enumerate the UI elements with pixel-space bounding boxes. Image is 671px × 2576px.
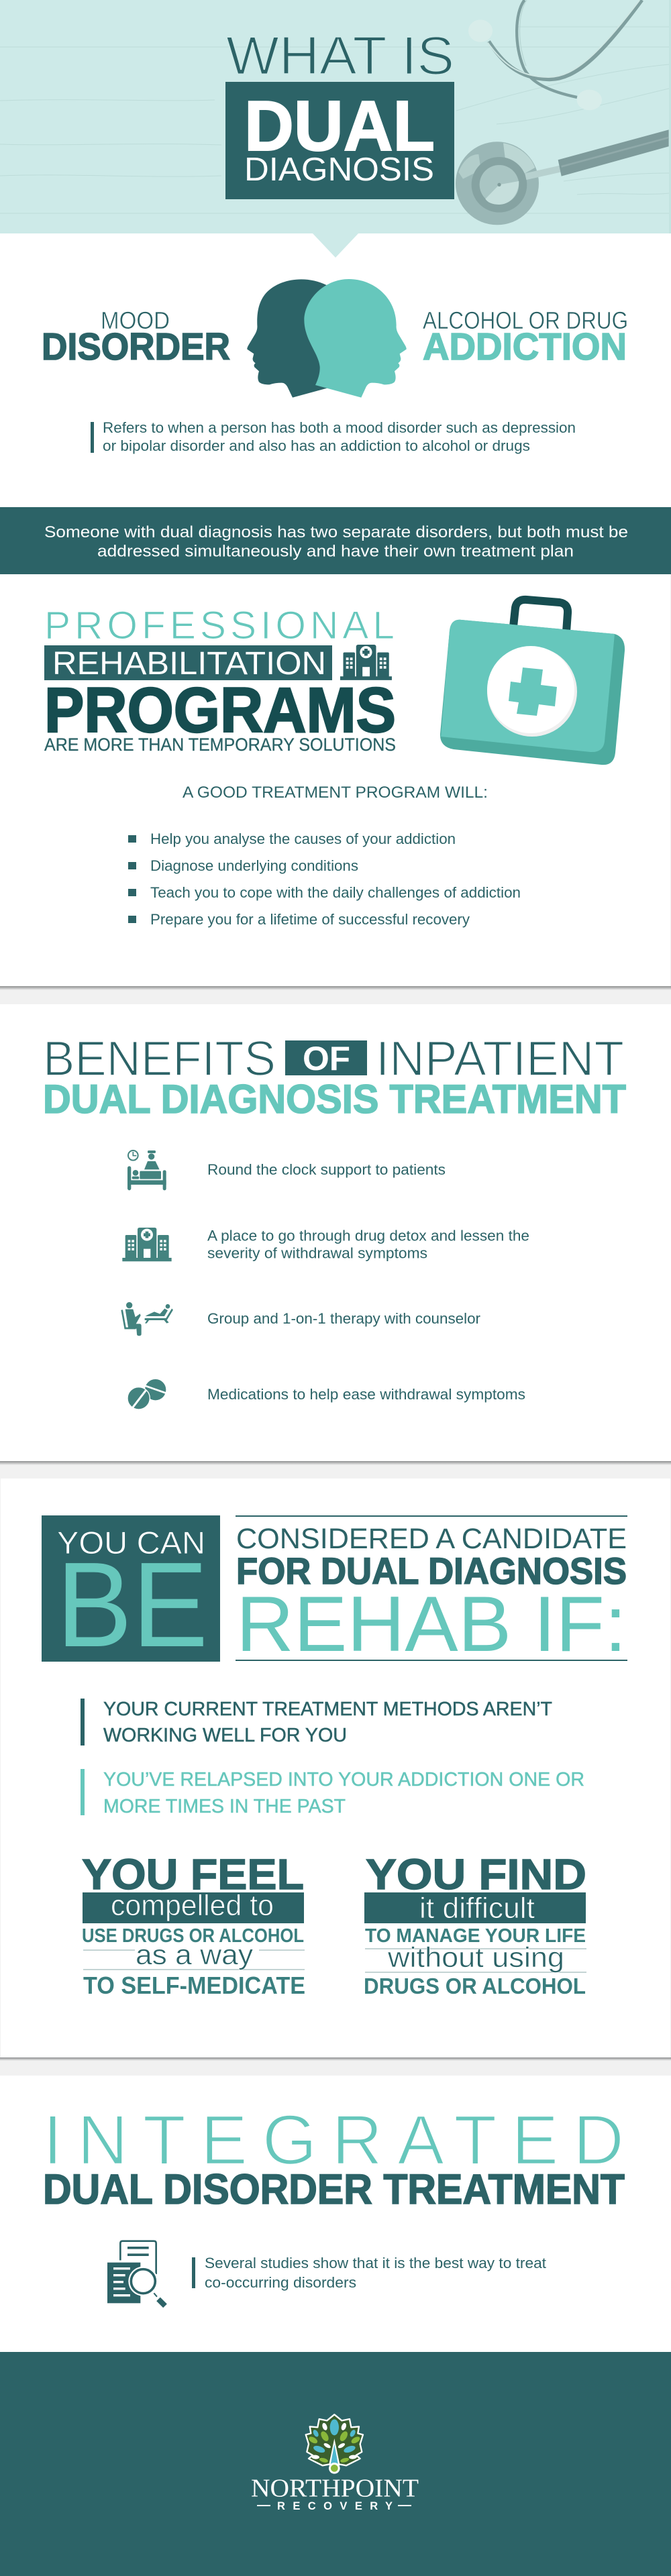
criterion: treatment not working: YOUR CURRENT TREATMENT METHODS AREN’T [103,1699,552,1720]
footer [0,2352,671,2576]
panel: benefits of inpatient treatment [0,1004,671,1465]
heading: programs: PROGRAMS [44,675,396,746]
list: program goals: Teach you to cope with the daily challenges of addiction [150,884,521,901]
callout: you feel: USE DRUGS OR ALCOHOL [82,1925,304,1947]
icon: small hospital [340,645,392,680]
callout: you find [364,1850,586,1998]
text block: definition: or bipolar disorder and also has an addiction to alcohol or drugs [103,437,530,454]
heading: integrated: INTEGRATED [43,2101,624,2180]
heading: dual diagnosis treatment: DUAL DIAGNOSIS TREATMENT [43,1077,626,1122]
text: drug detox: A place to go through drug detox and lessen the [207,1228,529,1244]
subheading: a good treatment program will: A GOOD TREATMENT PROGRAM WILL: [183,784,488,802]
heading: considered a candidate for dual diagnosis rehab if: CONSIDERED A CANDIDATE [236,1523,627,1555]
list: program goals: Diagnose underlying conditions [150,857,358,874]
text: round the clock support: Round the clock support to patients [207,1161,446,1178]
heading: are more than temporary solutions: ARE MORE THAN TEMPORARY SOLUTIONS [44,735,396,755]
heading: inpatient: INPATIENT [376,1032,624,1086]
callout: you feel: compelled to [111,1889,274,1922]
logo: peacock [306,2414,363,2474]
icon: pills [127,1379,167,1409]
text block: studies: Several studies show that it is the best way to treat [205,2255,547,2271]
criterion: relapsed: MORE TIMES IN THE PAST [103,1796,346,1817]
icon: nurse and bed [127,1150,166,1190]
label: alcohol or drug addiction: ADDICTION [423,325,627,368]
label: mood disorder [42,307,230,368]
banner: two separate disorders: Someone with dual diagnosis has two separate disorders, but both must be [44,523,628,541]
list: program goals: Prepare you for a lifetime of successful recovery [150,911,470,928]
criterion: treatment not working [81,1699,552,1746]
heading: professional: PROFESSIONAL [44,604,395,647]
banner: two separate disorders: addressed simultaneously and have their own treatment plan [97,542,574,561]
box: you can be: BE [56,1538,208,1672]
text: medications: Medications to help ease withdrawal symptoms [207,1386,525,1403]
icon: two heads [247,279,407,398]
panel: candidate criteria [0,1479,671,2061]
heading: of box [285,1040,367,1077]
icon: medical kit [440,600,625,765]
panel: integrated treatment [0,2076,671,2352]
callout: you feel: TO SELF-MEDICATE [83,1972,305,1999]
heading: rehabilitation box: REHABILITATION [52,646,326,682]
text block: definition: Refers to when a person has both a mood disorder such as depression [103,419,576,436]
label: mood disorder: DISORDER [42,325,230,368]
criterion: relapsed: YOU’VE RELAPSED INTO YOUR ADDICTION ONE OR [103,1769,584,1790]
callout: you find: YOU FIND [366,1850,586,1898]
list: program goals [128,830,521,928]
box: you can be: YOU CAN [57,1525,205,1560]
title box: dual diagnosis: DIAGNOSIS [244,152,434,188]
icon: stethoscope [456,0,669,225]
callout: you find: it difficult [419,1892,535,1925]
icon: therapy session [122,1302,173,1336]
callout: you feel [82,1850,305,1999]
heading: considered a candidate for dual diagnosis rehab if [236,1515,627,1668]
text: drug detox [207,1228,529,1261]
icon: documents and magnifier [107,2241,165,2306]
logo: wordmark: NORTHPOINT [251,2474,419,2502]
label: alcohol or drug addiction [423,307,628,368]
text block: studies: co-occurring disorders [205,2274,356,2291]
logo: recovery: RECOVERY [277,2500,393,2512]
text block: definition [91,419,576,454]
banner: two separate disorders [0,507,671,574]
icon: hospital [122,1228,172,1261]
callout: you find: TO MANAGE YOUR LIFE [365,1925,586,1947]
callout: you find: DRUGS OR ALCOHOL [364,1974,586,1998]
label: alcohol or drug addiction: ALCOHOL OR DRUG [423,307,628,334]
title box: dual diagnosis [225,82,454,199]
title box: dual diagnosis: DUAL [244,87,435,166]
panel: professional rehabilitation programs [0,574,671,990]
panel: hero [0,0,671,233]
label: mood disorder: MOOD [101,307,170,334]
pointer triangle [313,233,358,258]
callout: you find: without using [387,1941,564,1973]
text block: studies [192,2255,547,2291]
criterion: treatment not working: WORKING WELL FOR YOU [103,1725,347,1746]
criterion: relapsed [81,1769,584,1817]
heading: benefits: BENEFITS [43,1032,276,1086]
heading: considered a candidate for dual diagnosis rehab if: REHAB IF: [236,1580,627,1668]
heading: considered a candidate for dual diagnosis rehab if: FOR DUAL DIAGNOSIS [236,1550,627,1592]
callout: you feel: as a way [136,1939,253,1970]
text: group therapy: Group and 1-on-1 therapy with counselor [207,1310,480,1327]
title: what is: WHAT IS [226,25,454,86]
text: drug detox: severity of withdrawal symptoms [207,1245,427,1261]
list: program goals: Help you analyse the causes of your addiction [150,830,456,847]
heading: of box: OF [303,1040,350,1077]
panel: definition background [0,233,671,507]
heading: dual disorder treatment: DUAL DISORDER TREATMENT [43,2166,625,2213]
callout: you feel: YOU FEEL [82,1850,304,1898]
